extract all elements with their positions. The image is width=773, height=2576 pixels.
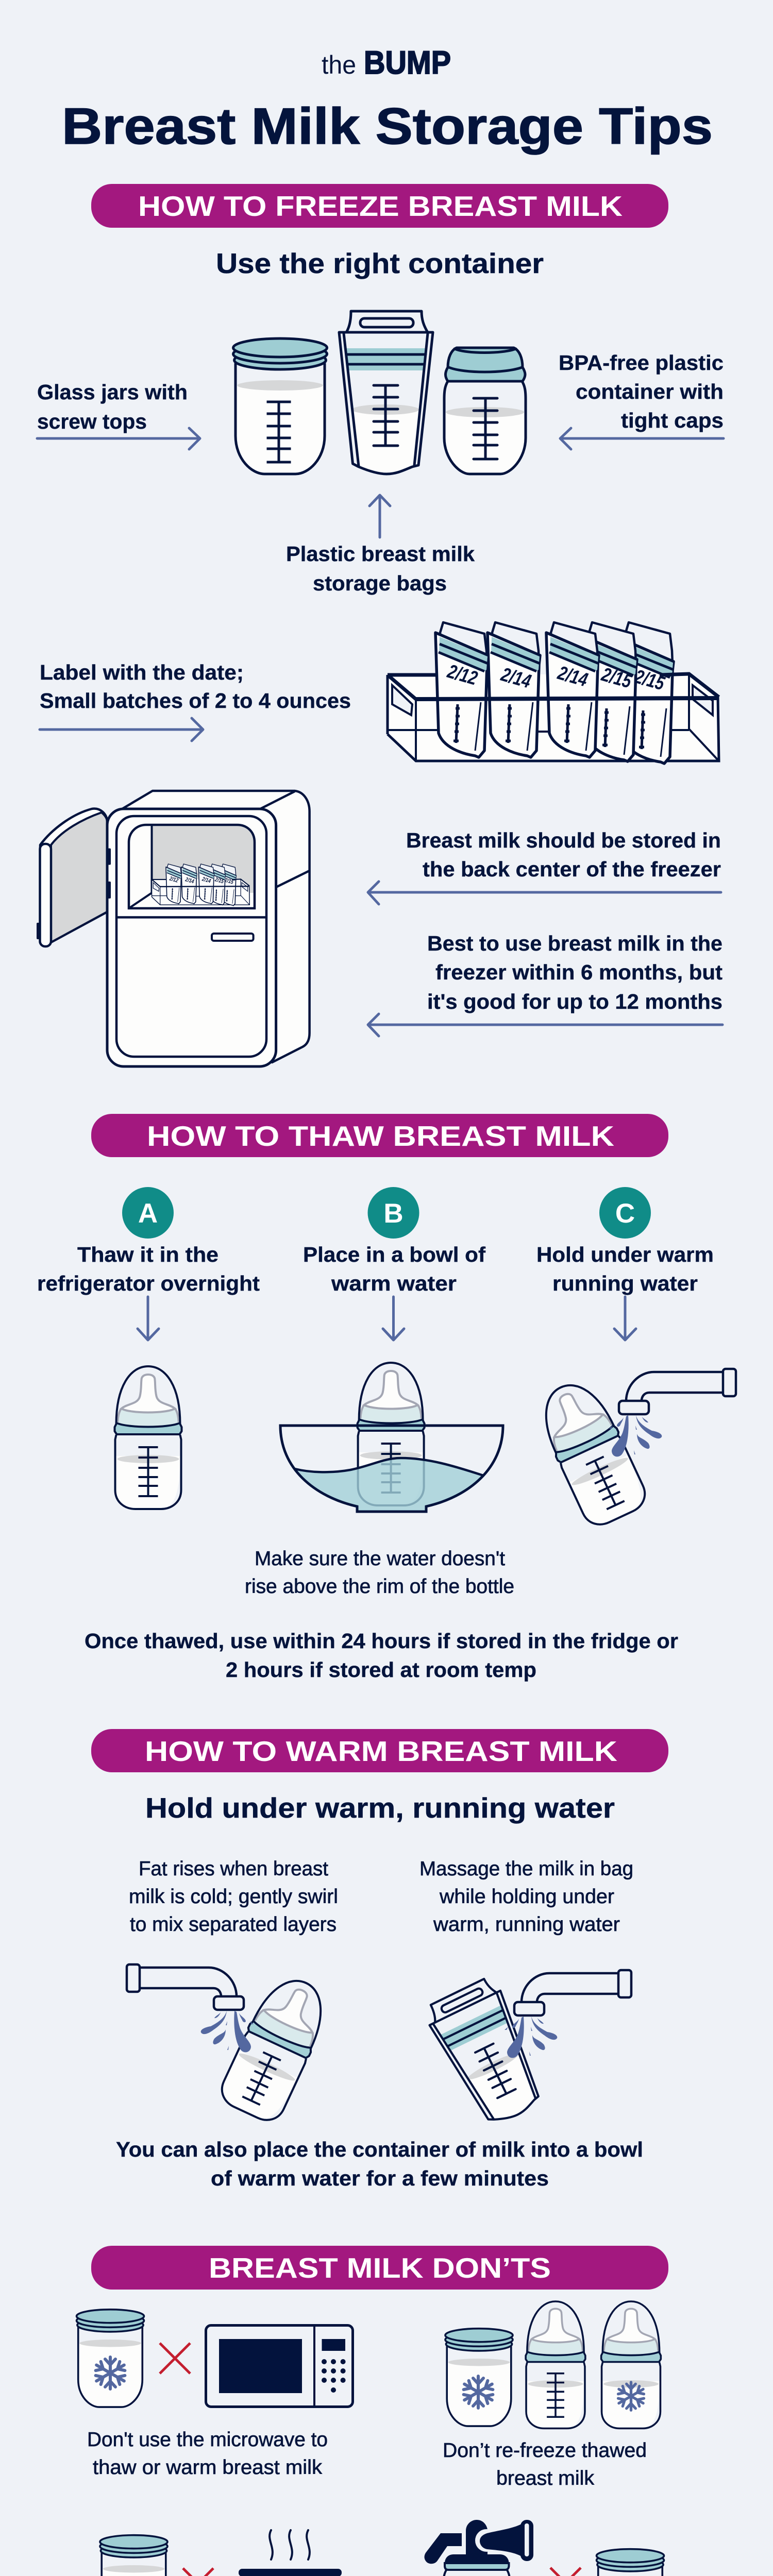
label: date and small batches bbox=[40, 660, 351, 713]
icon: red X bbox=[550, 2568, 581, 2576]
icon: plastic container bbox=[444, 348, 526, 474]
label: storage bags bbox=[286, 542, 475, 595]
label: glass jars bbox=[37, 380, 188, 433]
arrow: A down bbox=[138, 1297, 159, 1340]
badge: B: B bbox=[383, 1198, 404, 1229]
text: re-freeze warning: breast milk bbox=[496, 2467, 595, 2489]
section heading: how to freeze bbox=[91, 184, 668, 228]
arrow: to freezer back bbox=[368, 882, 721, 904]
label: glass jars: Glass jars with bbox=[37, 380, 188, 404]
text: massage bag: while holding under bbox=[439, 1886, 614, 1908]
note: bowl alternative: of warm water for a few minutes bbox=[211, 2166, 549, 2190]
arrow: to container bbox=[560, 428, 724, 449]
subheading: hold under water: Hold under warm, running water bbox=[145, 1792, 615, 1824]
text: swirl layers: Fat rises when breast bbox=[139, 1858, 328, 1880]
label: date and small batches: Small batches of 2 to 4 ounces bbox=[40, 689, 351, 713]
label: BPA-free container: container with bbox=[576, 380, 724, 403]
label: store in back center: Breast milk should be stored in bbox=[406, 828, 721, 852]
note: once thawed: 2 hours if stored at room temp bbox=[226, 1658, 536, 1682]
label: date and small batches: Label with the date; bbox=[40, 660, 244, 684]
text: re-freeze warning bbox=[443, 2439, 647, 2489]
icon: microwave bbox=[206, 2325, 352, 2407]
label: BPA-free container bbox=[559, 351, 724, 432]
section heading: how to freeze: HOW TO FREEZE BREAST MILK bbox=[138, 190, 623, 222]
note: once thawed bbox=[85, 1629, 678, 1682]
icon: frozen jar bbox=[76, 2310, 144, 2407]
label: glass jars: screw tops bbox=[37, 410, 147, 433]
icon: red X bbox=[160, 2343, 190, 2374]
section heading: don'ts bbox=[91, 2246, 668, 2290]
icon: bottle A bbox=[114, 1366, 181, 1509]
illustration: tray of dated bags bbox=[388, 622, 719, 764]
label: BPA-free container: tight caps bbox=[621, 409, 724, 432]
title: Breast Milk Storage Tips bbox=[62, 97, 713, 155]
icon: glass jar bbox=[233, 338, 327, 474]
label: use within 6 to 12 months bbox=[427, 931, 722, 1013]
text: massage bag: Massage the milk in bag bbox=[419, 1858, 633, 1880]
text: re-freeze warning: Don’t re-freeze thawed bbox=[443, 2439, 647, 2462]
label: BPA-free container: BPA-free plastic bbox=[559, 351, 724, 375]
icon: frozen jar and two bottles bbox=[445, 2301, 661, 2429]
text: swirl layers: milk is cold; gently swirl bbox=[129, 1886, 338, 1908]
illustration: faucet and bag bbox=[422, 1970, 631, 2132]
badge: B bbox=[368, 1187, 419, 1239]
badge: A bbox=[122, 1187, 174, 1239]
icon: frozen jar bbox=[100, 2535, 167, 2576]
label: bowl of warm water bbox=[303, 1243, 485, 1295]
section heading: how to thaw bbox=[91, 1114, 668, 1157]
note: bowl alternative bbox=[116, 2138, 643, 2190]
section heading: how to thaw: HOW TO THAW BREAST MILK bbox=[147, 1120, 614, 1152]
text: massage bag: warm, running water bbox=[433, 1913, 620, 1936]
label: thaw in refrigerator bbox=[37, 1243, 260, 1295]
illustration: freezer bbox=[37, 791, 310, 1066]
label: running water: running water bbox=[552, 1272, 698, 1295]
label: running water: Hold under warm bbox=[536, 1243, 714, 1266]
arrow: B down bbox=[383, 1297, 404, 1340]
arrow: C down bbox=[614, 1297, 636, 1340]
text: microwave warning: Don't use the microwave to bbox=[87, 2429, 328, 2451]
logo: the BUMP: BUMP bbox=[364, 45, 451, 81]
badge: C: C bbox=[615, 1198, 635, 1229]
section heading: don'ts: BREAST MILK DON’TS bbox=[209, 2252, 551, 2284]
logo: the BUMP: the bbox=[322, 50, 356, 79]
label: bowl of warm water: Place in a bowl of bbox=[303, 1243, 485, 1266]
note: water level bbox=[245, 1548, 514, 1598]
arrow: to jar bbox=[37, 428, 200, 449]
label: thaw in refrigerator: Thaw it in the bbox=[77, 1243, 219, 1266]
arrow: to freezer bbox=[368, 1014, 722, 1036]
text: massage bag bbox=[419, 1858, 633, 1936]
text: microwave warning bbox=[87, 2429, 328, 2479]
label: bowl of warm water: warm water bbox=[331, 1272, 457, 1295]
note: bowl alternative: You can also place the container of milk into a bowl bbox=[116, 2138, 643, 2161]
label: storage bags: Plastic breast milk bbox=[286, 542, 475, 566]
illustration: bottle in bowl bbox=[278, 1363, 503, 1525]
icon: storage bag bbox=[339, 311, 433, 474]
label: store in back center bbox=[406, 828, 721, 881]
badge: C bbox=[599, 1187, 651, 1239]
icon: red X bbox=[183, 2568, 213, 2576]
subheading: use the right container: Use the right container bbox=[216, 247, 544, 279]
badge: A: A bbox=[138, 1198, 158, 1229]
icon: breast pump bottle bbox=[425, 2520, 533, 2576]
label: thaw in refrigerator: refrigerator overnight bbox=[37, 1272, 260, 1295]
arrow: up to bag bbox=[369, 495, 390, 537]
illustration: faucet and bottle bbox=[127, 1964, 337, 2127]
note: water level: Make sure the water doesn't bbox=[255, 1548, 505, 1570]
text: swirl layers: to mix separated layers bbox=[130, 1913, 337, 1936]
label: use within 6 to 12 months: it's good for up to 12 months bbox=[427, 990, 722, 1013]
logo: the BUMP bbox=[322, 45, 451, 81]
note: water level: rise above the rim of the bottle bbox=[245, 1575, 514, 1598]
note: once thawed: Once thawed, use within 24 hours if stored in the fridge or bbox=[85, 1629, 678, 1653]
illustration: bottle under faucet bbox=[530, 1369, 736, 1531]
section heading: how to warm bbox=[91, 1729, 668, 1772]
label: use within 6 to 12 months: Best to use breast milk in the bbox=[427, 931, 722, 955]
arrow: to bag tray bbox=[40, 718, 203, 741]
label: store in back center: the back center of the freezer bbox=[423, 857, 721, 881]
text: microwave warning: thaw or warm breast milk bbox=[93, 2456, 323, 2479]
icon: boiling pot bbox=[228, 2530, 352, 2576]
section heading: how to warm: HOW TO WARM BREAST MILK bbox=[145, 1735, 617, 1767]
label: use within 6 to 12 months: freezer within 6 months, but bbox=[435, 960, 722, 984]
text: swirl layers bbox=[129, 1858, 338, 1936]
label: storage bags: storage bags bbox=[313, 571, 447, 595]
icon: frozen jar bbox=[596, 2549, 664, 2576]
label: running water bbox=[536, 1243, 714, 1295]
